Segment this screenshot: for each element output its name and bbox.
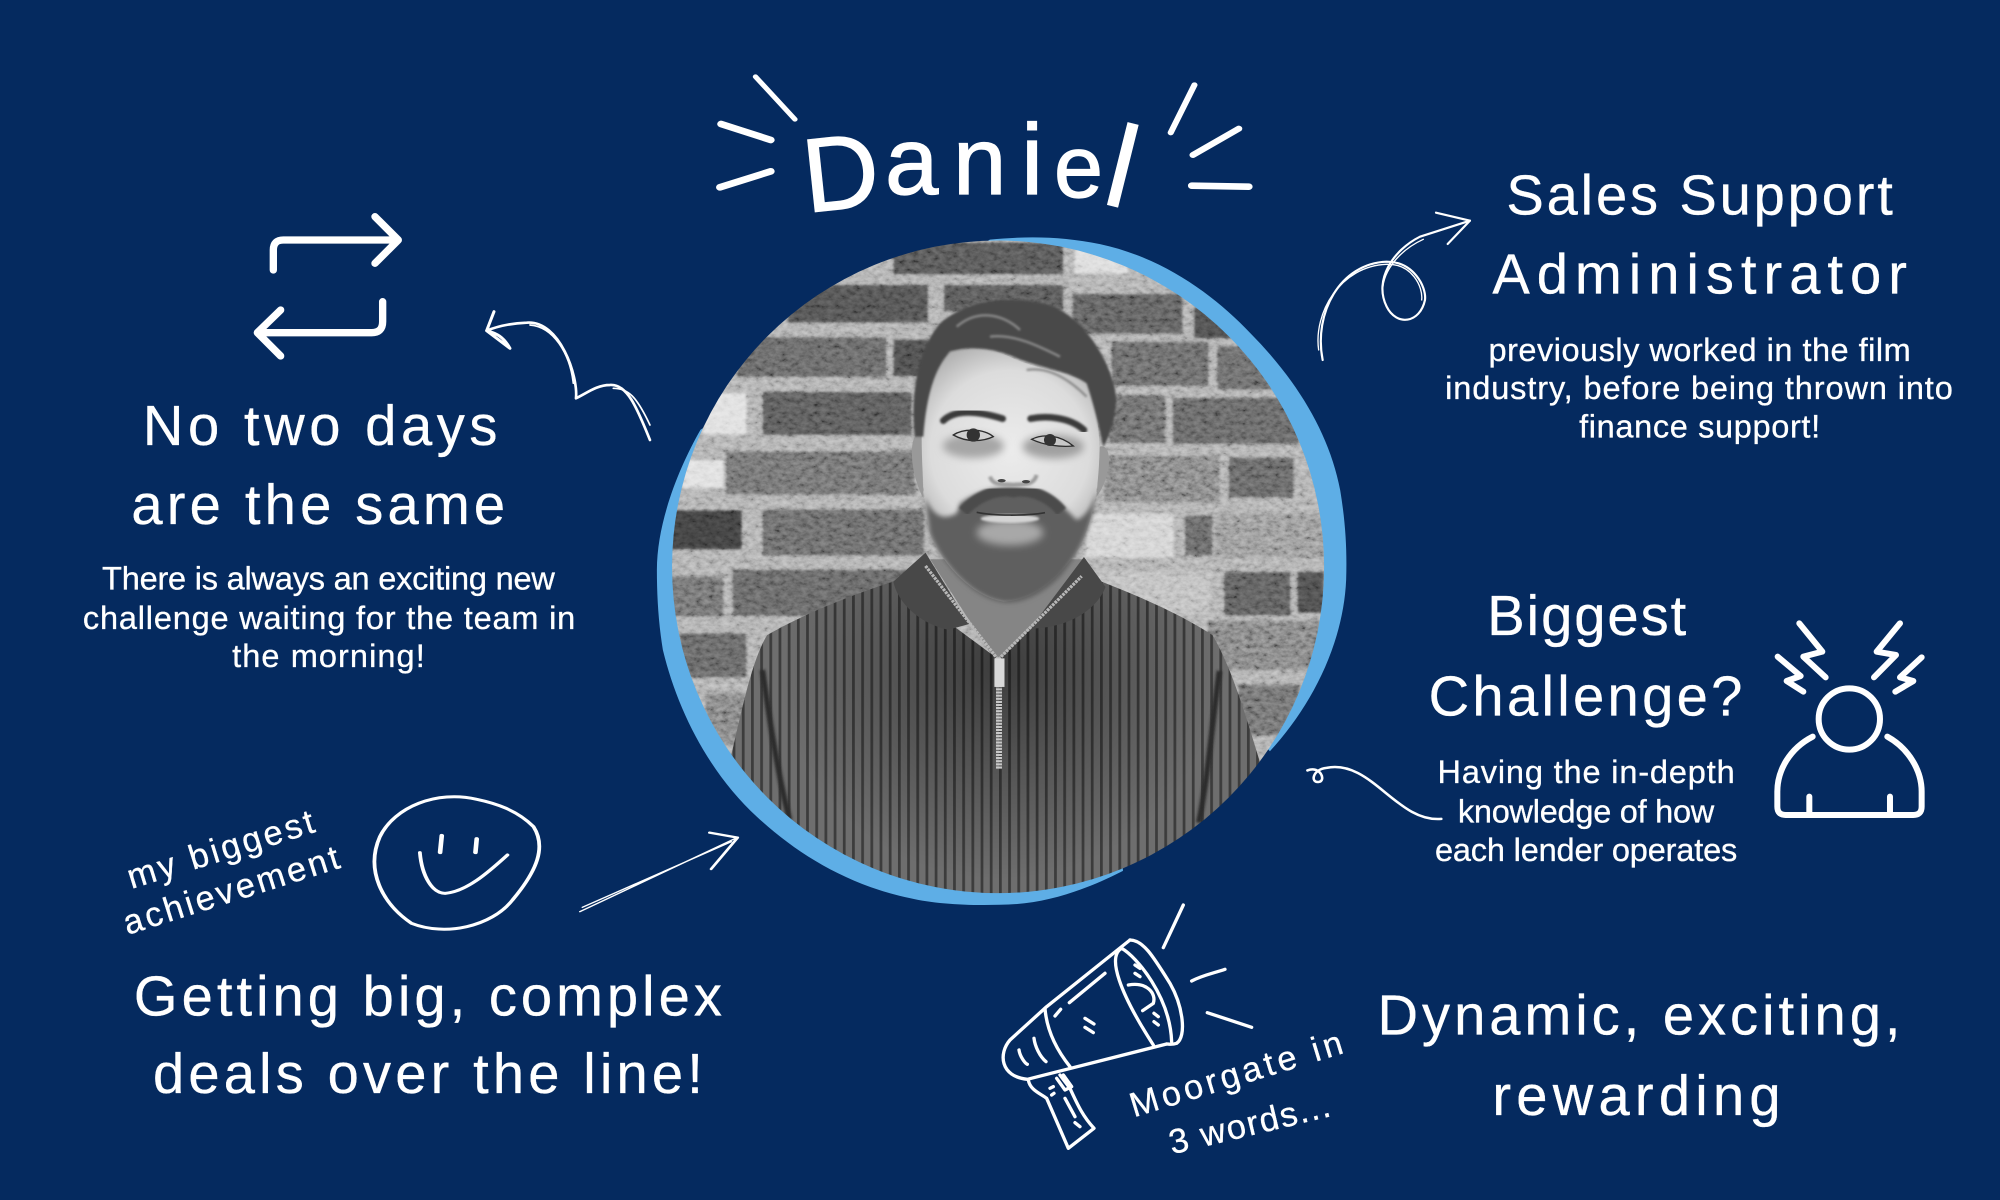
left eye: [953, 430, 993, 441]
text: job title body: finance support!: [1579, 408, 1820, 444]
text: biggest challenge body: each lender operates: [1435, 832, 1737, 868]
burst strokes around name: [720, 77, 1249, 187]
text: biggest challenge body: [1435, 754, 1737, 868]
heading: job title: Sales Support: [1506, 163, 1893, 226]
head: [912, 300, 1116, 603]
title: D: [797, 111, 885, 236]
zipper: [926, 566, 1082, 660]
text: job title body: [1445, 332, 1953, 444]
text: biggest challenge body: Having the in-depth: [1437, 754, 1735, 790]
text: no two days body: [83, 560, 575, 674]
rotated label: Moorgate in 3 words: Moorgate in: [1125, 1024, 1347, 1125]
ears: [912, 433, 1109, 498]
neck: [930, 559, 1086, 660]
text: no two days body: challenge waiting for the team in: [83, 600, 575, 636]
eye shadows: [943, 434, 1004, 458]
title: l: [1094, 101, 1151, 233]
arrow: loop to job title: [1318, 213, 1470, 360]
heading: three words: Dynamic, exciting,: [1378, 983, 1901, 1046]
portrait: photo in blue ring: [650, 220, 1370, 920]
hair streaks: [957, 315, 1087, 397]
moustache: [963, 491, 1062, 512]
icon: loop arrows: [257, 217, 398, 356]
sweater chest shadow: [818, 582, 1182, 844]
text: job title body: industry, before being thrown into: [1445, 370, 1953, 406]
rotated label: my biggest achievement: achievement: [119, 839, 344, 943]
heading: achievement: Getting big, complex: [134, 964, 722, 1027]
mouth line: [977, 512, 1045, 515]
icon: smiley: [374, 797, 539, 929]
icon: megaphone: [1003, 905, 1252, 1148]
heading: job title: [1492, 163, 1907, 305]
title: e: [1054, 117, 1103, 216]
heading: achievement: [134, 964, 722, 1105]
text: biggest challenge body: knowledge of how: [1458, 794, 1715, 830]
text: job title body: previously worked in the film: [1489, 332, 1911, 368]
arrow: achievement to photo: [580, 833, 738, 912]
sweater: [728, 575, 1261, 903]
lower lip: [981, 514, 1039, 523]
title: n: [953, 108, 1006, 215]
heading: biggest challenge: [1429, 584, 1742, 728]
title: i: [1021, 104, 1043, 216]
sleeve folds: [763, 670, 1219, 823]
brick wall: [672, 240, 1324, 823]
icon: stressed person: [1777, 623, 1922, 815]
photo: [672, 240, 1324, 894]
heading: three words: [1378, 983, 1901, 1127]
text: no two days body: There is always an exciting new: [102, 560, 555, 596]
text: no two days body: the morning!: [232, 638, 425, 674]
rotated label: my biggest achievement: my biggest: [123, 803, 319, 897]
heading: biggest challenge: Challenge?: [1429, 665, 1742, 728]
rotated label: Moorgate in 3 words: 3 words...: [1165, 1087, 1334, 1162]
photo and ring base: [650, 220, 1370, 920]
eyebrows: [943, 412, 1084, 430]
collar: [893, 553, 1106, 630]
heading: biggest challenge: Biggest: [1487, 584, 1687, 647]
title: [797, 101, 1151, 236]
title: a: [885, 108, 939, 215]
nose: [990, 475, 1037, 485]
heading: three words: rewarding: [1492, 1064, 1781, 1127]
chin patch: [977, 520, 1043, 545]
text layer scaled to layout grid: [83, 163, 1953, 1162]
right eye: [1032, 436, 1073, 446]
face: [922, 349, 1099, 602]
arrow: curved to loop icon: [487, 312, 650, 440]
beard: [925, 487, 1097, 603]
heading: no two days: [131, 394, 505, 536]
heading: no two days: are the same: [131, 473, 505, 536]
heading: achievement: deals over the line!: [153, 1042, 703, 1105]
heading: no two days: No two days: [143, 394, 497, 457]
arrow: squiggle to challenge: [1307, 767, 1441, 819]
heading: job title: Administrator: [1492, 242, 1907, 305]
hair: [913, 300, 1116, 447]
blue ring: [657, 237, 1346, 905]
